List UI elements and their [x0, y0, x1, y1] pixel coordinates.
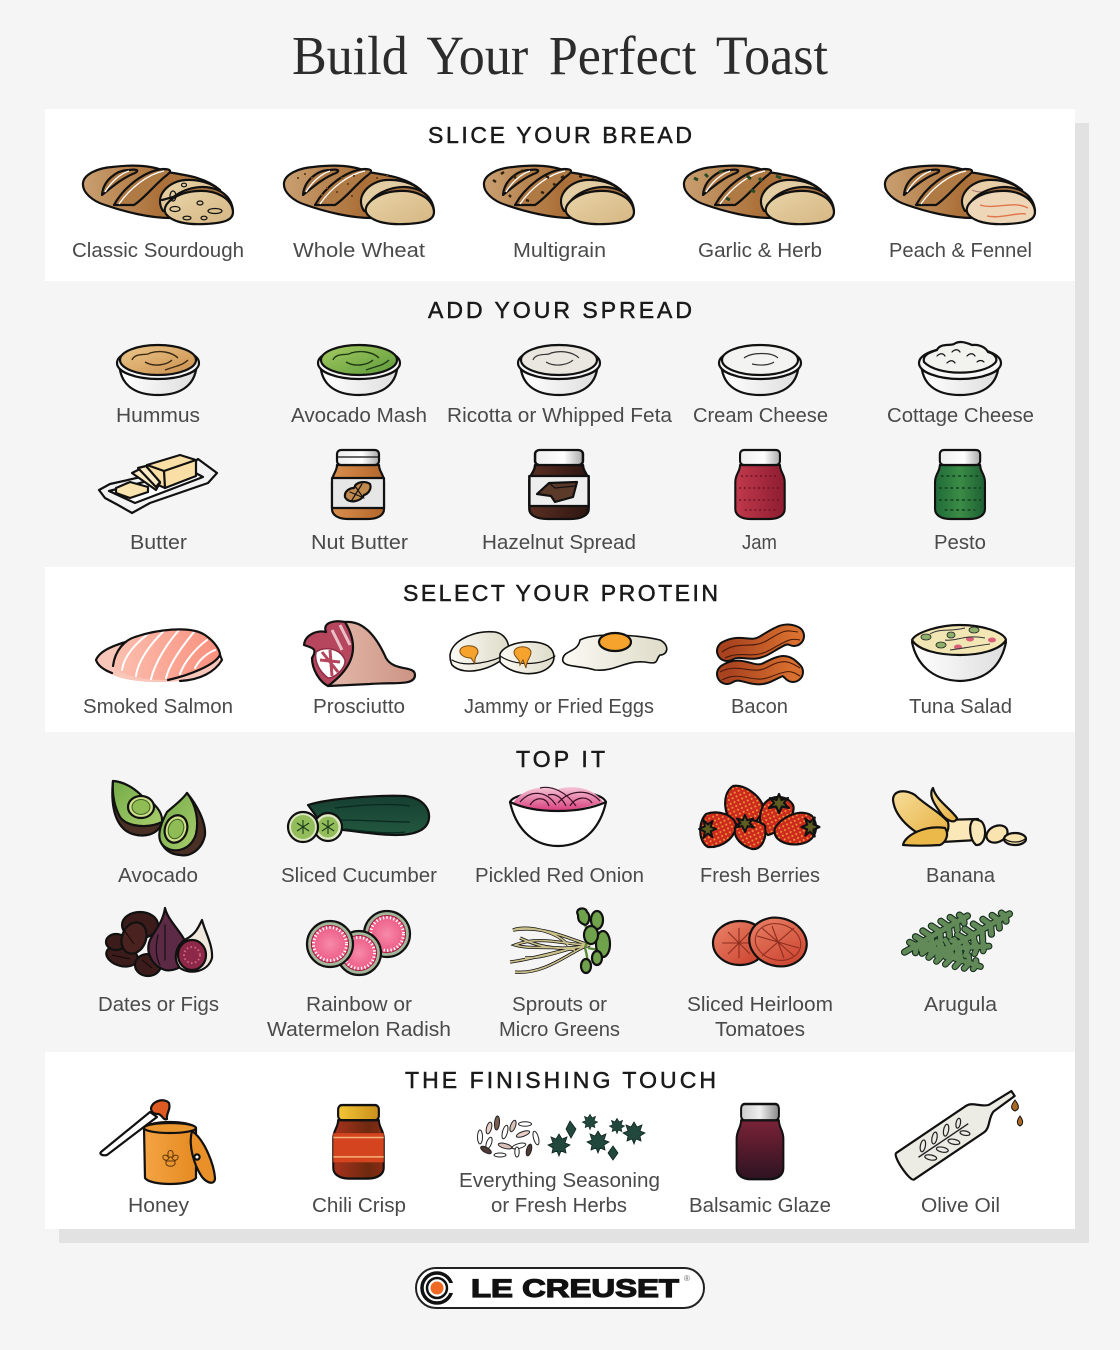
item: pesto: Pesto	[934, 532, 986, 554]
item: jam	[735, 450, 785, 554]
item: chili crisp: Chili Crisp	[312, 1195, 406, 1217]
item: smoked salmon: Smoked Salmon	[83, 696, 233, 718]
item: peach and fennel	[885, 166, 1035, 262]
item: honey: Honey	[128, 1195, 189, 1217]
title: Build Your Perfect Toast	[292, 25, 828, 86]
logo: le creuset: LE CREUSET	[471, 1275, 679, 1303]
item: cottage cheese	[887, 342, 1034, 427]
heading: select your protein: SELECT YOUR PROTEIN	[403, 580, 718, 606]
item: butter	[99, 455, 217, 554]
item: cream cheese: Cream Cheese	[693, 405, 828, 427]
item: rainbow or watermelon radish	[267, 911, 451, 1041]
item: jammy or fried eggs	[450, 632, 667, 718]
item: balsamic glaze	[689, 1104, 831, 1217]
item: bacon	[720, 631, 800, 718]
item: arugula	[900, 906, 1014, 1016]
item: classic sourdough: Classic Sourdough	[72, 240, 244, 262]
item: sliced heirloom tomatoes: Tomatoes	[715, 1019, 805, 1041]
panel: slice your bread	[45, 109, 1075, 281]
item: garlic and herb	[684, 166, 834, 262]
item: hazelnut spread: Hazelnut Spread	[482, 532, 636, 554]
item: arugula: Arugula	[924, 994, 998, 1016]
item: everything seasoning or fresh herbs: Everything Seasoning	[459, 1170, 660, 1192]
panel: add your spread	[99, 297, 1034, 554]
item: sliced heirloom tomatoes	[687, 911, 833, 1041]
item: cream cheese	[693, 345, 828, 427]
heading: slice your bread: SLICE YOUR BREAD	[428, 122, 692, 148]
item: balsamic glaze: Balsamic Glaze	[689, 1195, 831, 1217]
item: fresh berries: Fresh Berries	[700, 865, 820, 887]
card base	[45, 109, 1075, 1229]
card drop shadow	[59, 123, 1089, 1243]
item: hummus	[116, 345, 200, 427]
item: banana	[893, 788, 1026, 887]
item: tuna salad: Tuna Salad	[909, 696, 1012, 718]
item: rainbow or watermelon radish: Rainbow or	[306, 994, 412, 1016]
heading: top it: TOP IT	[516, 746, 605, 772]
item: butter: Butter	[130, 532, 187, 554]
item: everything seasoning or fresh herbs	[459, 1114, 660, 1217]
item: chili crisp	[312, 1105, 406, 1217]
item: ricotta or whipped feta: Ricotta or Whipped Feta	[447, 405, 673, 427]
item: prosciutto	[304, 621, 415, 718]
item: pesto	[934, 450, 986, 554]
item: smoked salmon	[83, 629, 233, 718]
item: everything seasoning or fresh herbs: or Fresh Herbs	[491, 1195, 627, 1217]
item: olive oil	[893, 1080, 1023, 1217]
item: avocado mash: Avocado Mash	[291, 405, 427, 427]
item: multigrain: Multigrain	[513, 240, 606, 262]
item: sliced cucumber: Sliced Cucumber	[281, 865, 437, 887]
item: avocado: Avocado	[118, 865, 198, 887]
item: sprouts or micro greens: Micro Greens	[499, 1019, 620, 1041]
logo: le creuset	[416, 1268, 704, 1308]
item: whole wheat: Whole Wheat	[293, 240, 425, 262]
item: hazelnut spread	[482, 450, 636, 554]
item: olive oil: Olive Oil	[921, 1195, 1000, 1217]
item: pickled red onion	[475, 787, 644, 887]
panel: top it	[98, 746, 1026, 1041]
item: sprouts or micro greens	[499, 908, 620, 1041]
item: nut butter	[311, 450, 408, 554]
item: classic sourdough	[72, 166, 244, 262]
item: hummus: Hummus	[116, 405, 200, 427]
heading: add your spread: ADD YOUR SPREAD	[428, 297, 692, 323]
item: sliced heirloom tomatoes: Sliced Heirloom	[687, 994, 833, 1016]
item: garlic and herb: Garlic & Herb	[698, 240, 822, 262]
item: cottage cheese: Cottage Cheese	[887, 405, 1034, 427]
item: fresh berries	[699, 786, 820, 887]
item: multigrain	[484, 166, 634, 262]
item: sprouts or micro greens: Sprouts or	[512, 994, 607, 1016]
item: ricotta or whipped feta	[447, 345, 673, 427]
item: jam: Jam	[742, 532, 777, 554]
item: nut butter: Nut Butter	[311, 532, 408, 554]
item: rainbow or watermelon radish: Watermelon Radish	[267, 1019, 451, 1041]
panel: select your protein	[45, 567, 1075, 732]
item: prosciutto: Prosciutto	[313, 696, 405, 718]
item: peach and fennel: Peach & Fennel	[889, 240, 1032, 262]
item: whole wheat	[284, 166, 434, 262]
item: banana: Banana	[926, 865, 996, 887]
item: avocado mash	[291, 345, 427, 427]
item: bacon: Bacon	[731, 696, 788, 718]
panel: the finishing touch	[45, 1052, 1075, 1229]
item: dates or figs: Dates or Figs	[98, 994, 219, 1016]
item: honey	[100, 1100, 215, 1217]
item: jammy or fried eggs: Jammy or Fried Eggs	[464, 696, 654, 718]
logo: le creuset: ®	[684, 1274, 690, 1283]
item: pickled red onion: Pickled Red Onion	[475, 865, 644, 887]
item: avocado	[112, 781, 205, 887]
item: dates or figs	[98, 908, 219, 1016]
heading: the finishing touch: THE FINISHING TOUCH	[405, 1067, 716, 1093]
item: sliced cucumber	[281, 796, 437, 887]
item: tuna salad	[909, 625, 1012, 718]
